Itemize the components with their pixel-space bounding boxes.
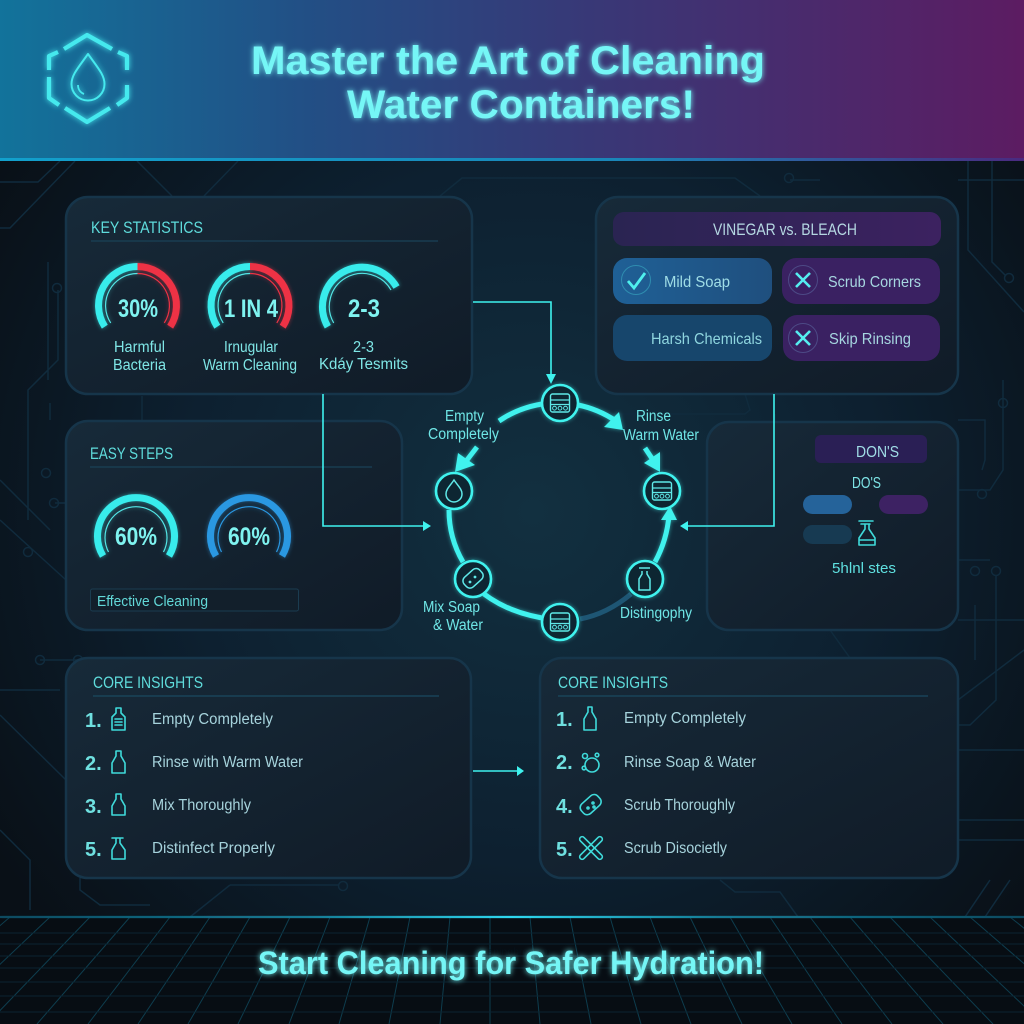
- panel: core insights left: CORE INSIGHTS: [93, 673, 203, 692]
- row 4: Scrub Disocietly: [624, 840, 727, 857]
- circuit board background traces: [0, 161, 1024, 917]
- label box: effective cleaning: [90, 589, 298, 611]
- title: Water Containers!: [347, 83, 695, 127]
- gauge: 60% cyan: [97, 498, 174, 556]
- panel: do's and don'ts: DON'S: [856, 444, 899, 461]
- watermark: cleaningbro.com: [474, 946, 551, 958]
- label box: effective cleaning: Effective Cleaning: [97, 593, 208, 610]
- gauge: 30%: [99, 266, 176, 374]
- panel: easy steps: EASY STEPS: [90, 444, 173, 463]
- row 4: [556, 836, 727, 861]
- call to action: Start Cleaning for Safer Hydration!: [258, 945, 764, 981]
- node: spray bottle: [627, 561, 663, 597]
- node: sponge: [455, 561, 491, 597]
- title: [251, 39, 765, 127]
- gauge: 30%: Bacteria: [113, 357, 166, 374]
- cycle labels: & Water: [433, 617, 483, 634]
- button: skip rinsing: [783, 315, 940, 361]
- panel: easy steps: [66, 421, 402, 630]
- panel: core insights left: [66, 658, 471, 878]
- button: scrub corners: Scrub Corners: [828, 274, 921, 291]
- dim arc segment: [580, 594, 631, 619]
- gauge: 1 in 4: 1 IN 4: [224, 295, 278, 323]
- panel: vinegar vs bleach: [596, 197, 958, 394]
- gauge: 1 in 4: [203, 266, 297, 374]
- row 3: [85, 794, 251, 818]
- row 4: Distinfect Properly: [152, 840, 275, 857]
- gauge: 30%: 30%: [118, 295, 158, 323]
- gauge: 2-3: Kdáy Tesmits: [319, 356, 408, 373]
- row 1: [85, 708, 273, 732]
- arrow: statistics to cycle: [473, 302, 556, 384]
- gauge: 2-3: 2-3: [353, 339, 374, 356]
- button: scrub corners: [782, 258, 940, 304]
- cycle labels: Rinse: [636, 408, 671, 425]
- header banner: [0, 0, 1024, 161]
- footer band: [0, 916, 1024, 1024]
- panel: key statistics: [66, 197, 472, 394]
- panel: core insights right: [540, 658, 958, 878]
- row 1: Empty Completely: [152, 711, 273, 728]
- panel: do's and don'ts: [707, 422, 958, 630]
- row 4: 5.: [85, 839, 102, 861]
- node: bottom: [542, 604, 578, 640]
- arrow: statistics down to cycle: [323, 394, 431, 531]
- row 4: 5.: [556, 839, 573, 861]
- button: harsh chemicals: [613, 315, 772, 361]
- row 1: 1.: [556, 709, 573, 731]
- button: harsh chemicals: Harsh Chemicals: [651, 331, 762, 348]
- panel: key statistics: KEY STATISTICS: [91, 218, 203, 237]
- row 3: 4.: [556, 796, 573, 818]
- gauge: 30%: Harmful: [114, 339, 165, 356]
- row 2: 2.: [85, 753, 102, 775]
- icon: spray bottle: [859, 521, 875, 545]
- button: mild soap: [613, 258, 772, 304]
- row 3: Mix Thoroughly: [152, 797, 251, 814]
- cycle labels: [423, 408, 699, 634]
- gauge: 60% cyan: 60%: [115, 523, 157, 551]
- button: skip rinsing: Skip Rinsing: [829, 331, 911, 348]
- arrow: vinegar panel to cycle: [680, 394, 774, 531]
- row 1: [556, 707, 746, 731]
- cycle diagram: [423, 385, 699, 640]
- row 2: 2.: [556, 752, 573, 774]
- panel: do's and don'ts: DO'S: [852, 475, 881, 492]
- row 3: 3.: [85, 796, 102, 818]
- row 1: Empty Completely: [624, 710, 746, 727]
- row 4: [85, 838, 275, 861]
- glowing horizon line: [0, 916, 1024, 918]
- row 3: [556, 792, 735, 818]
- row 1: 1.: [85, 710, 102, 732]
- row 3: Scrub Thoroughly: [624, 797, 735, 814]
- icon: hexagon water drop logo: [49, 35, 127, 122]
- row 2: [556, 752, 756, 774]
- button: mild soap: Mild Soap: [664, 274, 730, 291]
- gauge: 2-3: 2-3: [348, 295, 380, 323]
- gauge: 60% blue: [210, 498, 288, 556]
- cycle labels: Warm Water: [623, 427, 699, 444]
- gauge: 1 in 4: Irnugular: [224, 339, 278, 356]
- heading pill: [613, 212, 941, 246]
- row 2: Rinse with Warm Water: [152, 754, 303, 771]
- title: Master the Art of Cleaning: [251, 39, 765, 83]
- row 2: Rinse Soap & Water: [624, 754, 756, 771]
- node: top: [542, 385, 578, 421]
- panel: do's and don'ts: 5hlnl stes: [832, 560, 896, 577]
- gauge: 1 in 4: Warm Cleaning: [203, 357, 297, 374]
- row 2: [85, 751, 303, 775]
- perspective grid: [0, 917, 1024, 1024]
- cycle labels: Distingophy: [620, 605, 692, 622]
- panel: core insights right: CORE INSIGHTS: [558, 673, 668, 692]
- arrow: core insights link: [473, 766, 524, 776]
- node: left drop: [436, 473, 472, 509]
- cycle arcs: [449, 404, 677, 618]
- cycle labels: Mix Soap: [423, 599, 480, 616]
- node: right: [644, 473, 680, 509]
- cycle labels: Completely: [428, 426, 499, 443]
- heading pill: VINEGAR vs. BLEACH: [713, 221, 857, 239]
- gauge: 2-3: [319, 267, 408, 373]
- gauge: 60% blue: 60%: [228, 523, 270, 551]
- cycle labels: Empty: [445, 408, 484, 425]
